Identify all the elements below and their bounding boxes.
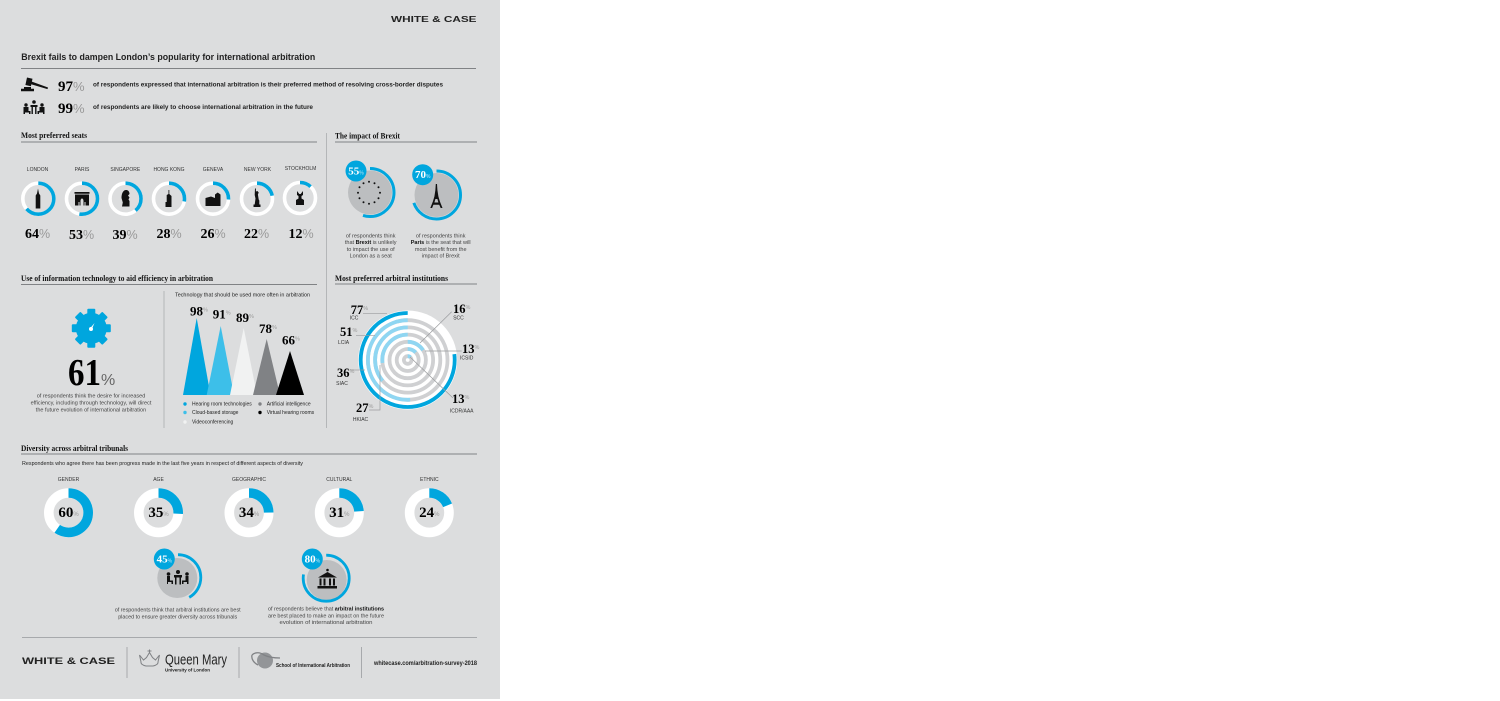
donut: cultural: 31 <box>329 505 344 521</box>
seat: Geneva: 26% <box>200 227 226 242</box>
label: ICC: % <box>363 306 368 312</box>
stat: 97%: 97% <box>58 79 85 95</box>
donut: gender: % <box>73 512 79 518</box>
seat: London: LONDON <box>27 167 49 173</box>
label: LCIA: 51 <box>340 325 352 339</box>
donut: ethnic: ETHNIC <box>420 477 439 483</box>
logo: White & Case header: WHITE & CASE <box>391 14 477 24</box>
text: 61% caption: efficiency, including through technology, will direct <box>31 400 152 406</box>
seat: London <box>23 167 54 242</box>
label: HKIAC: 27 <box>356 401 368 415</box>
text: 45 caption: of respondents think that arbitral institutions are best <box>115 608 241 614</box>
text: Paris caption <box>411 234 471 260</box>
label: HKIAC <box>353 401 374 423</box>
chart: 80 percent: 80% <box>305 554 321 566</box>
text: Paris caption: of respondents think <box>416 234 466 240</box>
icon: meeting table <box>24 100 44 114</box>
seat: Singapore: 39% <box>112 228 138 243</box>
seat: Singapore: SINGAPORE <box>110 167 141 173</box>
text: Paris caption: Paris is the seat that will <box>411 240 471 246</box>
chart: technology triangles: % <box>226 310 231 316</box>
text: preferred method: of respondents expressed that international arbitration is their preferred method of resolving cross-border disputes <box>93 82 443 88</box>
text: 80 caption: are best placed to make an impact on the future <box>268 613 384 619</box>
chart: 45 percent: 45% <box>157 554 173 566</box>
chart: technology triangles: % <box>249 314 254 320</box>
seat: Singapore <box>110 167 141 243</box>
seat: Stockholm: STOCKHOLM <box>285 166 316 172</box>
donut: gender: 60 <box>58 505 73 521</box>
logo: Queen Mary: Queen Mary <box>165 652 227 668</box>
url: whitecase.com/arbitration-survey-2018 <box>373 661 478 667</box>
label: ICDR/AAA: % <box>464 395 470 401</box>
text: Brexit caption <box>345 234 397 260</box>
donut: geographic: GEOGRAPHIC <box>232 477 266 483</box>
label: SIAC <box>336 366 354 387</box>
heading: The impact of Brexit <box>335 130 400 140</box>
chart: technology triangles: % <box>203 308 208 314</box>
seat: Geneva <box>198 167 228 242</box>
label: SCC: % <box>466 305 470 311</box>
donut: age: 35 <box>148 505 163 521</box>
text: likely to choose: of respondents are likely to choose international arbitration in the future <box>93 104 313 111</box>
label: SCC: SCC <box>453 316 464 322</box>
label: SCC <box>453 302 470 322</box>
chart: 55 percent Brexit <box>346 160 394 216</box>
panel: information technology <box>21 273 317 428</box>
donut: cultural <box>320 477 359 532</box>
donut: cultural: % <box>344 512 350 518</box>
label: LCIA: LCIA <box>338 340 350 346</box>
stat: 99%: 99% <box>58 101 85 117</box>
legend: technologies: Artificial intelligence <box>267 402 311 408</box>
donut: age <box>139 477 178 532</box>
donut: ethnic: % <box>434 512 440 518</box>
chart: technology triangles <box>175 292 310 395</box>
donut: gender <box>49 477 88 532</box>
text: Paris caption: impact of Brexit <box>422 254 460 260</box>
legend: technologies <box>183 402 315 426</box>
chart: technology triangles: 89 <box>236 310 249 325</box>
text: 61% caption: the future evolution of international arbitration <box>36 408 146 414</box>
chart: 55 percent Brexit: 55% <box>348 166 364 178</box>
background panel <box>0 0 500 699</box>
subheading: Respondents who agree there has been progress made in the last five years in respect of different aspects of diversity <box>22 461 303 467</box>
donut: ethnic: 24 <box>419 505 434 521</box>
text: 80 caption: evolution of international arbitration <box>280 620 372 626</box>
seat: Paris <box>66 167 98 243</box>
legend: technologies: Cloud-based storage <box>192 410 239 416</box>
donut: age: % <box>163 512 169 518</box>
label: LCIA <box>338 325 358 346</box>
icon: Eiffel tower <box>430 184 442 208</box>
label: ICDR/AAA <box>450 392 474 414</box>
footer <box>22 638 478 678</box>
heading: Use of information technology to aid efficiency in arbitration <box>21 273 213 283</box>
text: Brexit caption: that Brexit is unlikely <box>345 240 397 246</box>
seat: New York <box>242 167 272 242</box>
chart: 70 percent Paris: 70% <box>415 169 431 181</box>
seat: Hong Kong: HONG KONG <box>153 167 185 173</box>
label: SCC: 16 <box>453 302 466 316</box>
text: 61% caption <box>31 394 152 414</box>
donut: geographic: 34 <box>239 505 254 521</box>
label: HKIAC: HKIAC <box>353 417 369 423</box>
panel: impact of Brexit <box>335 130 477 260</box>
label: SIAC: 36 <box>337 366 350 380</box>
icon: EU stars <box>357 181 381 205</box>
label: ICSID: % <box>474 345 480 351</box>
panel: most preferred seats <box>21 130 317 243</box>
donut: age: AGE <box>153 477 164 483</box>
donut: ethnic <box>410 477 449 532</box>
logo: School of International Arbitration: School of International Arbitration <box>276 663 350 669</box>
icon: blue gear <box>72 309 111 348</box>
heading: Most preferred seats <box>21 130 88 140</box>
label: ICDR/AAA: 13 <box>452 392 464 406</box>
label: ICDR/AAA: ICDR/AAA <box>450 408 474 414</box>
leader lines <box>350 312 462 410</box>
vertical divider <box>326 133 328 428</box>
key stats panel <box>21 78 443 117</box>
seat: London: 64% <box>25 227 50 242</box>
donut: geographic: % <box>254 512 260 518</box>
donut: cultural: CULTURAL <box>326 477 353 483</box>
logo: Queen Mary: University of London <box>165 668 210 672</box>
text: Brexit caption: London as a seat <box>350 254 392 260</box>
label: SIAC: SIAC <box>336 381 348 387</box>
label: ICSID: ICSID <box>460 356 474 362</box>
text: 80 caption <box>268 607 384 626</box>
seat: Hong Kong: 28% <box>156 227 182 242</box>
text: Brexit caption: to impact the use of <box>347 247 395 253</box>
chart: 80 percent <box>302 548 349 601</box>
icon: gavel <box>21 78 48 91</box>
icon: meeting table small <box>167 570 189 584</box>
panel: arbitral institutions <box>335 273 480 423</box>
chart: 70 percent Paris <box>412 164 460 219</box>
chart: technology triangles: 78 <box>259 321 272 336</box>
title: Brexit fails to dampen London’s popularity for international arbitration <box>21 52 315 63</box>
label: ICSID: 13 <box>462 342 474 356</box>
legend: technologies: Hearing room technologies <box>192 402 252 408</box>
logo: White & Case footer: WHITE & CASE <box>22 656 115 667</box>
seat: Stockholm <box>284 166 316 242</box>
text: 80 caption: of respondents believe that arbitral institutions <box>268 607 384 613</box>
donut: gender: GENDER <box>58 477 80 483</box>
chart: 45 percent <box>154 548 201 600</box>
label: SIAC: % <box>350 369 354 375</box>
heading: Most preferred arbitral institutions <box>335 273 449 283</box>
label: ICSID <box>460 342 480 362</box>
text: 45 caption <box>115 608 241 620</box>
legend: technologies: Virtual hearing rooms <box>267 410 315 416</box>
text: 61% caption: of respondents think the desire for increased <box>37 394 145 400</box>
seat: New York: NEW YORK <box>244 167 272 173</box>
icon: institution building <box>318 569 337 588</box>
label: LCIA: % <box>352 328 358 334</box>
text: Paris caption: most benefit from the <box>415 247 467 253</box>
logo: School of International Arbitration <box>252 652 350 669</box>
chart: radial rings <box>358 310 457 410</box>
chart: technology triangles: 98 <box>190 304 203 318</box>
stat: 61%: 61 <box>68 352 101 394</box>
logo: Queen Mary <box>140 650 227 672</box>
donut: geographic <box>229 477 269 532</box>
stat: 61%: % <box>101 372 115 389</box>
seat: Hong Kong <box>153 167 185 242</box>
label: ICC: 77 <box>351 303 363 317</box>
seat: Stockholm: 12% <box>288 227 314 242</box>
panel: diversity <box>21 443 477 626</box>
text: Brexit caption: of respondents think <box>346 234 396 240</box>
label: HKIAC: % <box>368 404 374 410</box>
seat: Paris: 53% <box>69 228 94 243</box>
seat: Paris: PARIS <box>75 167 90 173</box>
chart: technology triangles: % <box>295 336 300 342</box>
chart: technology triangles: 66 <box>282 332 295 348</box>
heading: Diversity across arbitral tribunals <box>21 443 129 453</box>
seat: Geneva: GENEVA <box>203 167 224 173</box>
seat: New York: 22% <box>244 227 269 242</box>
label: ICC <box>350 303 368 322</box>
legend: technologies: Videoconferencing <box>192 420 234 426</box>
chart: technology triangles: % <box>272 325 277 331</box>
chart: technology triangles: 91 <box>213 306 226 322</box>
chart: technology triangles: Technology that should be used more often in arbitration <box>175 292 310 298</box>
label: ICC: ICC <box>350 316 359 322</box>
text: 45 caption: placed to ensure greater diversity across tribunals <box>118 614 237 620</box>
